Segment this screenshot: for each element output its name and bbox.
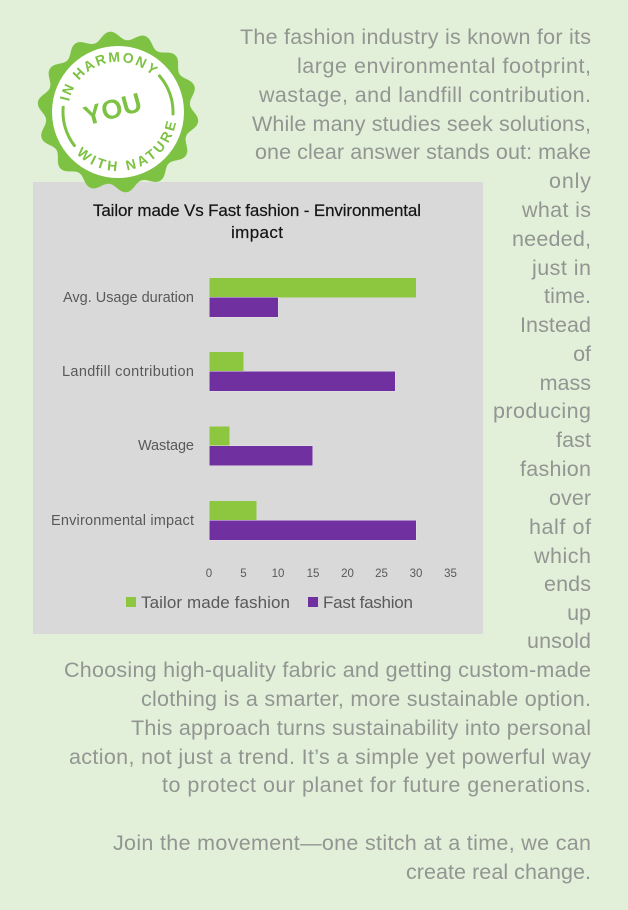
text block: call for custom-made clothing bbox=[64, 658, 591, 797]
text block: introduction wrapping around chart: up bbox=[567, 601, 591, 625]
icon: In harmony with nature badge: YOU bbox=[80, 87, 145, 131]
icon: In harmony with nature badge: WITH NATURE bbox=[78, 121, 176, 172]
legend: Fast fashion bbox=[323, 593, 413, 612]
text block: join the movement bbox=[113, 831, 591, 884]
x axis labels: 10 bbox=[272, 568, 284, 580]
text block: call for custom-made clothing: to protect our planet for future generations. bbox=[162, 773, 591, 797]
text block: introduction wrapping around chart: just in bbox=[531, 256, 591, 280]
legend: Tailor made fashion bbox=[141, 593, 290, 612]
text block: introduction wrapping around chart: While many studies seek solutions, bbox=[252, 112, 591, 136]
panel: chart bbox=[33, 182, 483, 634]
x axis labels: 30 bbox=[410, 568, 422, 580]
text block: introduction wrapping around chart: unsold bbox=[527, 629, 591, 653]
text block: introduction wrapping around chart: of bbox=[573, 342, 591, 366]
category labels: Environmental impact bbox=[51, 513, 194, 529]
text block: introduction wrapping around chart: mass bbox=[540, 371, 591, 395]
text block: introduction wrapping around chart: Instead bbox=[520, 313, 591, 337]
chart title bbox=[93, 201, 421, 242]
text block: introduction wrapping around chart bbox=[240, 25, 591, 653]
text block: introduction wrapping around chart: over bbox=[549, 486, 591, 510]
bar chart bbox=[209, 278, 416, 540]
text block: introduction wrapping around chart: ends bbox=[544, 572, 591, 596]
text block: introduction wrapping around chart: only bbox=[549, 169, 591, 193]
x axis labels: 0 bbox=[206, 568, 212, 580]
x axis labels: 25 bbox=[375, 568, 388, 580]
text block: join the movement: create real change. bbox=[406, 860, 591, 884]
icon: In harmony with nature badge bbox=[38, 32, 198, 192]
text block: introduction wrapping around chart: wastage, and landfill contribution. bbox=[258, 83, 591, 107]
text block: introduction wrapping around chart: The fashion industry is known for its bbox=[240, 25, 591, 49]
x axis labels bbox=[206, 568, 457, 580]
text block: introduction wrapping around chart: half of bbox=[529, 515, 591, 539]
text block: introduction wrapping around chart: fast bbox=[556, 428, 591, 452]
text block: call for custom-made clothing: clothing is a smarter, more sustainable option. bbox=[141, 687, 591, 711]
text block: introduction wrapping around chart: what is bbox=[521, 198, 591, 222]
text block: introduction wrapping around chart: fashion bbox=[520, 457, 591, 481]
text block: introduction wrapping around chart: time. bbox=[544, 284, 591, 308]
chart title: impact bbox=[231, 223, 283, 242]
category labels bbox=[51, 290, 194, 529]
chart title: Tailor made Vs Fast fashion - Environmental bbox=[93, 201, 421, 220]
x axis labels: 15 bbox=[307, 568, 319, 580]
text block: join the movement: Join the movement—one stitch at a time, we can bbox=[113, 831, 591, 855]
text block: introduction wrapping around chart: which bbox=[533, 544, 591, 568]
x axis labels: 20 bbox=[341, 568, 354, 580]
text block: call for custom-made clothing: action, not just a trend. It’s a simple yet powerful way bbox=[69, 745, 591, 769]
category labels: Avg. Usage duration bbox=[63, 290, 194, 306]
text block: introduction wrapping around chart: producing bbox=[493, 399, 591, 423]
text block: call for custom-made clothing: This approach turns sustainability into personal bbox=[131, 716, 591, 740]
icon: In harmony with nature badge: IN HARMONY bbox=[60, 52, 158, 101]
text block: introduction wrapping around chart: needed, bbox=[512, 227, 591, 251]
text block: call for custom-made clothing: Choosing high-quality fabric and getting custom-made bbox=[64, 658, 591, 682]
category labels: Wastage bbox=[138, 438, 194, 454]
text block: introduction wrapping around chart: large environmental footprint, bbox=[297, 54, 591, 78]
x axis labels: 5 bbox=[240, 568, 247, 580]
x axis labels: 35 bbox=[444, 568, 457, 580]
category labels: Landfill contribution bbox=[62, 364, 194, 380]
legend bbox=[126, 593, 413, 612]
text block: introduction wrapping around chart: one clear answer stands out: make bbox=[255, 140, 591, 164]
